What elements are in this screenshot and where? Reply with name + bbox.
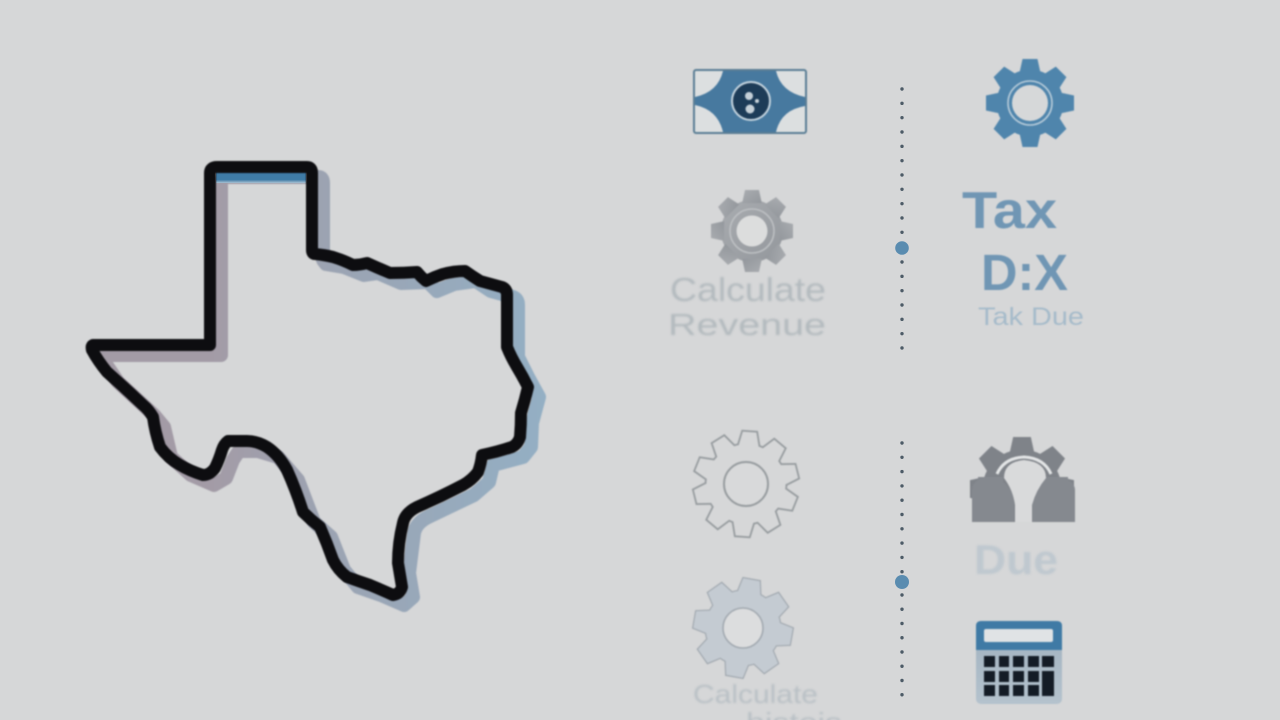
label: Calculate Revenue: Calculate — [670, 271, 826, 308]
dotted divider: upper — [895, 89, 909, 349]
label: Due: Due — [974, 536, 1058, 583]
icon: light gear — [686, 571, 800, 685]
icon: grey gear — [711, 190, 793, 272]
blue highlight under panhandle top — [216, 172, 306, 183]
icon: outlined gear — [690, 428, 802, 540]
icon: banknote — [694, 70, 806, 133]
label: Calculate Revenue: Revenue — [668, 307, 826, 342]
label: Calculate (bottom): Calculate — [693, 679, 818, 709]
Texas state outline map — [92, 167, 539, 605]
map drop shadow — [103, 177, 539, 605]
icon: gear with bottles — [969, 436, 1076, 523]
label: Calculate Revenue — [668, 271, 826, 342]
map outline stroke — [92, 167, 528, 595]
icon: blue gear — [986, 59, 1074, 147]
heading: D:X: D:X — [981, 244, 1068, 301]
label: Tak Due: Tak Due — [978, 303, 1084, 331]
heading: Tax: Tax — [962, 182, 1057, 240]
icon: calculator — [976, 621, 1062, 704]
label: Calculate (bottom) — [693, 679, 842, 720]
dotted divider: lower — [895, 443, 909, 696]
